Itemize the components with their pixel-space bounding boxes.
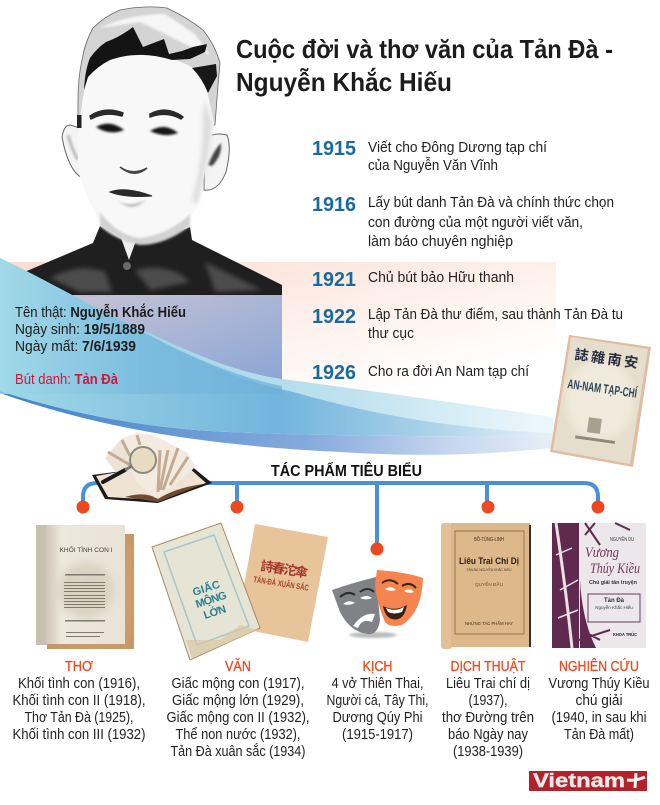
personal info: Bút danh: Tản Đà [15,372,119,388]
caption: NGHIÊN CỨU: (1940, in sau khi [552,710,646,726]
title: Nguyễn Khắc Hiếu [236,67,452,97]
timeline entry 1915: của Nguyễn Văn Vĩnh [368,157,498,174]
caption: DỊCH THUẬT: Liêu Trai chí dị [446,676,530,692]
book cover: Vương Thúy Kiều: NGUYỄN DU [610,536,634,543]
caption: KỊCH: Dương Qúy Phi [332,710,422,726]
decorative blue swoosh: dark lower band [0,391,553,455]
timeline entry 1916: làm báo chuyên nghiệp [368,234,513,250]
book cover: Vương Thúy Kiều: Nguyễn Khắc Hiếu [595,604,633,610]
timeline entry 1916: con đường của một người viết văn, [368,215,583,231]
timeline entry 1922 [312,306,623,342]
personal info [15,303,186,388]
personal info: Tên thật: Nguyễn Khắc Hiếu [15,303,186,321]
timeline entry 1921: 1921 [312,269,356,291]
title: Cuộc đời và thơ văn của Tản Đà - [236,34,613,64]
book cover: Giấc mộng lớn [152,523,260,660]
book cover: Vương Thúy Kiều: Vương [585,545,619,561]
book cover: Liêu Trai chí dị: Liêu Trai Chí Dị [459,556,519,567]
book cover: Giấc mộng lớn: MỘNG [194,589,228,611]
timeline entry 1916: Lấy bút danh Tản Đà và chính thức chọn [368,195,614,211]
timeline entry 1922: thư cục [368,326,414,342]
decorative blue swoosh: pale upper band [143,330,553,433]
book cover: Vương Thúy Kiều: KHOA TRÚC [613,631,638,637]
timeline entry 1921: Chủ bút bảo Hữu thanh [368,270,514,286]
book cover: Khối tình con [36,525,134,649]
caption: VĂN: Thể non nước (1932), [176,727,300,743]
timeline entry 1922: Lập Tản Đà thư điếm, sau thành Tản Đà tu [368,307,623,323]
caption: THƠ [12,658,146,743]
personal info: Ngày sinh: 19/5/1889 [15,322,145,338]
timeline entry 1921 [312,269,514,291]
caption: NGHIÊN CỨU [548,658,650,743]
caption: THƠ: Thơ Tản Đà (1925), [24,710,134,726]
caption: DỊCH THUẬT: thơ Đường trên [442,710,534,726]
timeline entry 1926: Cho ra đời An Nam tạp chí [368,364,529,380]
decorative blue swoosh: main teal band [0,258,553,437]
panel: personal info background [0,295,282,394]
icon: theatre masks [332,570,423,638]
connector lines [83,483,598,549]
book cover: Vương Thúy Kiều: Chú giải tân truyện [589,580,638,586]
book cover: Giấc mộng lớn: LỚN [202,602,228,622]
red connector dots [76,500,604,556]
book cover: An Nam tạp chí [550,335,651,467]
caption: THƠ: Khối tình con III (1932) [12,727,146,743]
caption: KỊCH: Người cá, Tây Thi, [326,693,428,709]
personal info: Ngày mất: 7/6/1939 [15,339,136,355]
icon: open book with magnifier [92,433,212,503]
book cover: Tản Đà xuân sắc: TẢN-ĐÀ XUÂN SẮC [253,573,310,593]
caption: DỊCH THUẬT: (1937), [468,693,508,709]
caption: NGHIÊN CỨU: NGHIÊN CỨU [559,658,639,675]
book cover: Liêu Trai chí dị: TẢN ĐÀ NGUYỄN KHẮC HIẾU [466,567,512,572]
caption: VĂN [166,658,310,760]
timeline entry 1915: Viết cho Đông Dương tạp chí [368,140,547,156]
timeline entry 1915: 1915 [312,138,356,160]
caption: NGHIÊN CỨU: chú giải [576,693,622,709]
book cover: Vương Thúy Kiều [552,523,646,648]
book cover: Liêu Trai chí dị: BỒ-TÙNG-LINH [474,536,504,543]
caption: THƠ: THƠ [65,658,93,675]
portrait of Tản Đà [22,7,282,295]
timeline [312,138,623,384]
caption: KỊCH: (1915-1917) [342,727,413,743]
caption: KỊCH: 4 vở Thiên Thai, [332,676,424,692]
timeline entry 1922: 1922 [312,306,356,328]
caption: NGHIÊN CỨU: Vương Thúy Kiều [548,676,650,692]
book cover: Liêu Trai chí dị: NHỮNG TÁC PHẨM HAY [465,620,513,626]
caption: THƠ: Khối tình con II (1918), [12,693,146,709]
caption: DỊCH THUẬT: (1938-1939) [453,744,523,760]
caption: KỊCH: KỊCH [362,658,392,675]
caption: VĂN: Giấc mộng con (1917), [172,676,304,692]
timeline entry 1915 [312,138,547,174]
caption: KỊCH [326,658,428,743]
caption: VĂN: VĂN [225,658,251,675]
book cover: Khối tình con: KHỐI TÌNH CON I [60,544,113,554]
caption: DỊCH THUẬT [442,658,534,760]
book cover: Liêu Trai chí dị [441,523,531,649]
timeline entry 1926 [312,362,529,384]
timeline entry 1916: 1916 [312,194,356,216]
caption: NGHIÊN CỨU: Tản Đà mất) [564,727,634,743]
book cover: Vương Thúy Kiều: Thúy Kiều [590,561,640,577]
title [236,34,613,97]
caption: THƠ: Khối tình con (1916), [18,676,140,692]
timeline entry 1926: 1926 [312,362,356,384]
caption: DỊCH THUẬT: DỊCH THUẬT [450,658,526,675]
book cover: Tản Đà xuân sắc [233,524,328,642]
book cover: An Nam tạp chí: 誌雜南安 [574,346,639,371]
caption: VĂN: Tản Đà xuân sắc (1934) [170,743,306,760]
logo: Vietnam+: Vietnam [533,771,625,792]
caption: DỊCH THUẬT: báo Ngày nay [448,727,529,743]
logo: Vietnam+ [529,771,647,792]
panel: peach timeline background [0,262,556,394]
book cover: Tản Đà xuân sắc: 詩春沱傘 [260,558,309,580]
book cover: Giấc mộng lớn: GIẤC [191,578,222,599]
caption: VĂN: Giấc mộng con II (1932), [166,710,310,726]
panel overlay: lower strip of info box [0,258,282,394]
section heading: TÁC PHẨM TIÊU BIỂU [271,462,422,480]
book cover: Vương Thúy Kiều: Tản Đà [604,598,625,604]
book cover: Liêu Trai chí dị: QUYỂN ĐẦU [475,581,503,587]
caption: VĂN: Giấc mộng lớn (1929), [172,693,304,709]
timeline entry 1916 [312,194,614,250]
